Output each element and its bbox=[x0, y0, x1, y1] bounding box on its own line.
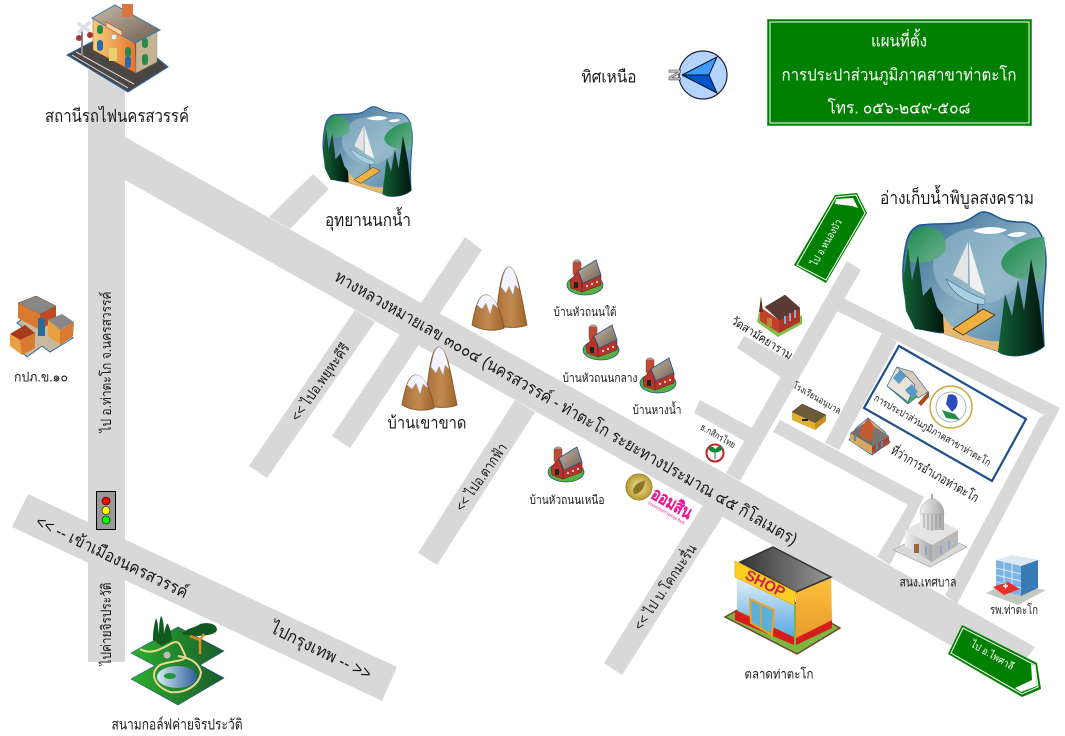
icon: shop: SHOP bbox=[742, 567, 788, 601]
golf label: สนามกอล์ฟค่ายจิรประวัติ bbox=[112, 716, 242, 734]
icon: golf course bbox=[131, 616, 224, 705]
logo: Government Savings Bank: ออมสิน bbox=[648, 484, 697, 523]
sign: to Phaisali bbox=[948, 625, 1041, 697]
main highway label: ทางหลวงหมายเลข ๓๐๐๔ (นครสวรรค์ - ท่าตะโก ระยะทางประมาณ ๔๕ กิโลเมตร) bbox=[331, 266, 801, 549]
label: Ban Hua Thanon Nuea: บ้านหัวถนนเหนือ bbox=[530, 493, 604, 507]
icon: municipal office bbox=[893, 494, 967, 567]
icon: barn middle bbox=[583, 324, 619, 360]
road label: Tak Fa: << ไปอ.ตากฟ้า bbox=[452, 440, 510, 514]
label: Ban Hua Thanon Klang: บ้านหัวถนนกลาง bbox=[562, 371, 638, 385]
road: bird park branch bbox=[269, 174, 329, 229]
icon: traffic light bbox=[96, 492, 116, 530]
icon: north compass bbox=[666, 51, 727, 99]
sign: to Nong Bua: ไป อ.หนองบัว bbox=[808, 217, 845, 269]
icon: Government Savings Bank coin bbox=[626, 474, 652, 500]
label: Ban Hua Thanon Tai: บ้านหัวถนนใต้ bbox=[554, 305, 616, 319]
label: kindergarten: โรงเรียนอนุบาล bbox=[791, 380, 843, 417]
label: Ban Khao Khat: บ้านเขาขาด bbox=[388, 414, 466, 432]
label: temple: วัดสามัคยาราม bbox=[729, 314, 795, 362]
sign: to Nong Bua bbox=[794, 193, 867, 283]
panel: waterworks office box bbox=[864, 346, 1026, 481]
title box: การประปาส่วนภูมิภาคสาขาท่าตะโก bbox=[782, 64, 1016, 86]
logo: Government Savings Bank: Government Savings Bank bbox=[647, 500, 686, 526]
road: inner connector bbox=[825, 333, 897, 450]
icon: shop bbox=[725, 547, 840, 654]
road label: to Tha Tako: ไป อ.ท่าตะโก จ.นครสวรรค์ bbox=[98, 292, 114, 433]
icon: district office bbox=[849, 418, 890, 455]
icon: mountains lower bbox=[402, 347, 457, 410]
road: main highway 3004 bbox=[125, 137, 1035, 680]
label: waterworks office: การประปาส่วนภูมิภาคสาขาท่าตะโก bbox=[872, 391, 993, 469]
title box: โทร. ๐๕๖-๒๔๙-๕๐๘ bbox=[828, 98, 970, 118]
icon: barn Hang Nam bbox=[640, 358, 676, 393]
label: municipal office: สนง.เทศบาล bbox=[900, 574, 956, 590]
icon: waterworks building bbox=[887, 367, 929, 406]
icon: reservoir lake bbox=[903, 212, 1046, 356]
road: right loop bbox=[945, 408, 1060, 604]
road label: into Nakhon Sawan: << -- เข้าเมืองนครสวรรค์ bbox=[33, 512, 191, 602]
road: upper loop bbox=[837, 298, 1060, 415]
icon: mountains upper bbox=[472, 267, 527, 330]
road label: to Chiraprawat camp: ไปค่ายจิรประวัติ bbox=[98, 582, 114, 666]
sign: to Phaisali: ไป อ.ไพศาลี bbox=[968, 638, 1016, 673]
road label: Phayuha Khiri: << ไปอ.พยุหะคีรี bbox=[287, 340, 354, 424]
icon: north compass: N bbox=[666, 69, 684, 81]
bird park label: อุทยานนกน้ำ bbox=[325, 207, 411, 231]
title box bbox=[768, 20, 1032, 126]
icon: barn north bbox=[548, 446, 584, 482]
north label: ทิศเหนือ bbox=[582, 68, 636, 86]
icon: Kasikorn bank bbox=[706, 444, 724, 462]
label: Tha Tako market: ตลาดท่าตะโก bbox=[744, 666, 814, 682]
station label: สถานีรถไฟนครสวรรค์ bbox=[45, 105, 189, 126]
icon: railway station bbox=[67, 4, 168, 92]
label: district office: ที่ว่าการอำเภอท่าตะโก bbox=[888, 442, 982, 505]
road: Phayuha Khiri bbox=[249, 310, 375, 478]
label: Ban Hang Nam: บ้านหางน้ำ bbox=[632, 401, 682, 417]
road: bank stub bbox=[694, 400, 754, 442]
road: Nong Bua bbox=[726, 261, 861, 481]
road: Ban Khao Khat bbox=[332, 237, 482, 448]
icon: regional office building bbox=[10, 296, 74, 357]
icon: barn south bbox=[567, 260, 603, 295]
road: lower loop bbox=[773, 420, 924, 565]
road: temple stub bbox=[737, 336, 793, 378]
icon: temple bbox=[757, 295, 802, 337]
label: Kasikorn bank: ธ.กสิกรไทย bbox=[699, 422, 737, 450]
road: Tak Fa bbox=[418, 400, 535, 565]
title box: แผนที่ตั้ง bbox=[871, 28, 927, 50]
label: hospital: รพ.ท่าตะโก bbox=[990, 603, 1038, 617]
icon: waterworks seal bbox=[930, 386, 972, 428]
icon: kindergarten bbox=[792, 404, 826, 430]
reservoir label: อ่างเก็บน้ำพิบูลสงคราม bbox=[880, 185, 1034, 209]
icon: hospital bbox=[986, 555, 1046, 605]
road: north-south highway bbox=[88, 70, 125, 662]
regional office label: กปภ.ข.๑๐ bbox=[14, 370, 68, 384]
icon: bird park lake bbox=[323, 107, 412, 197]
road label: Khok Maruen: << ไป บ.โคกมะรื่น bbox=[630, 540, 700, 633]
road label: to Bangkok: ไปกรุงเทพ -- >> bbox=[265, 617, 375, 685]
road: to Bangkok crossing bbox=[12, 494, 397, 701]
road: Khok Maruen bbox=[604, 505, 723, 675]
